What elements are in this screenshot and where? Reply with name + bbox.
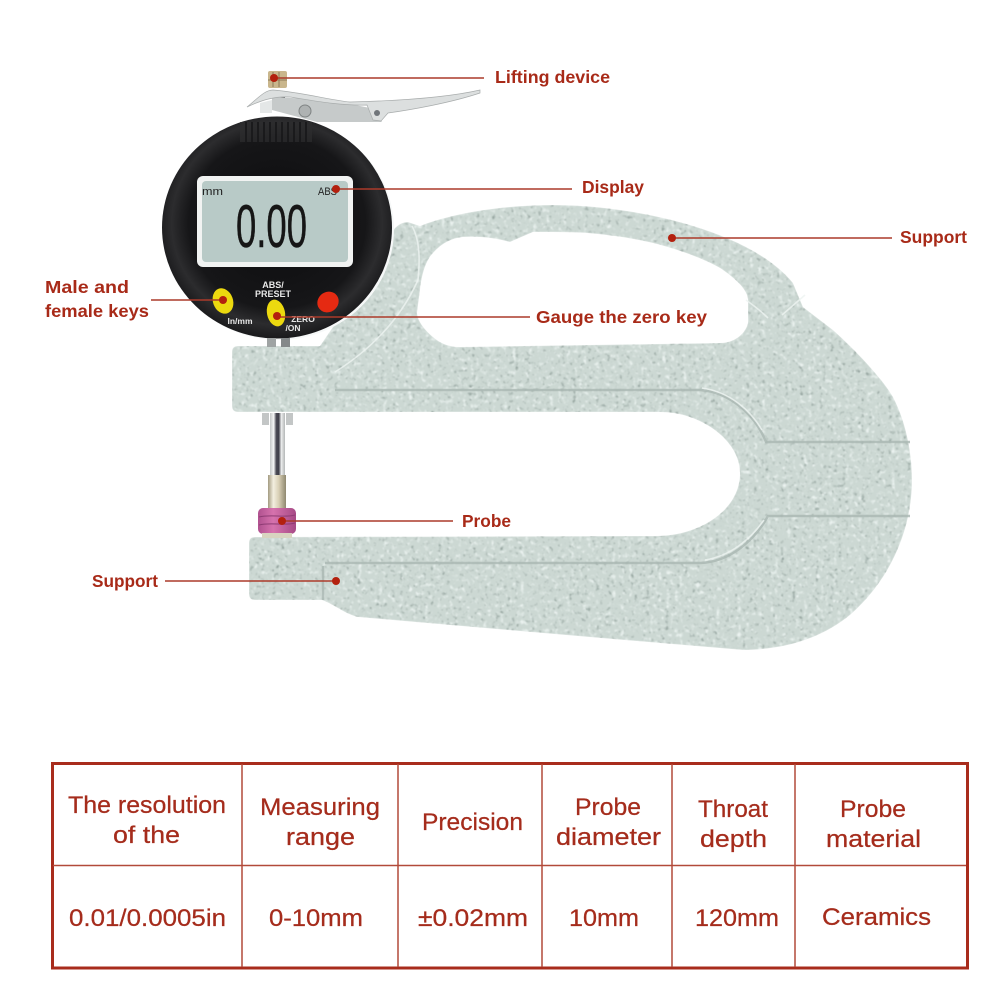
column: measuring range: [260, 794, 380, 932]
callout: lower support: [92, 571, 340, 591]
callout: upper support: Support: [900, 227, 967, 247]
column: throat depth: depth: [700, 826, 767, 853]
column: throat depth: [695, 796, 779, 932]
digital dial: [162, 116, 394, 347]
callout: probe: Probe: [462, 511, 511, 531]
callout: upper support: [668, 227, 967, 247]
column: resolution: of the: [113, 822, 180, 849]
callout: male and female keys: female keys: [45, 301, 149, 321]
LCD display: [197, 176, 353, 267]
probe: [258, 413, 296, 538]
column: resolution: 0.01/0.0005in: [69, 905, 226, 932]
column: precision: Precision: [422, 809, 523, 836]
column: resolution: [68, 792, 226, 932]
column: resolution: The resolution: [68, 792, 226, 819]
LCD display: 0.00: [236, 193, 307, 260]
column: probe material: material: [826, 826, 921, 853]
callout: gauge the zero key: [273, 307, 707, 327]
column: measuring range: 0-10mm: [269, 905, 363, 932]
dial keys: In/mm: [227, 316, 253, 326]
callout: display: [332, 177, 644, 197]
column: precision: ±0.02mm: [418, 905, 528, 932]
dial keys: ABS/: [262, 280, 284, 290]
callout: lower support: Support: [92, 571, 158, 591]
column: probe diameter: 10mm: [569, 905, 639, 932]
column: probe material: Ceramics: [822, 904, 931, 931]
dial keys: ZERO: [291, 314, 315, 324]
specification table: [52, 764, 968, 968]
column: probe diameter: [556, 794, 661, 932]
callout: male and female keys: Male and: [45, 277, 129, 297]
callout: gauge the zero key: Gauge the zero key: [536, 307, 707, 327]
column: probe material: Probe: [840, 796, 906, 823]
callout: male and female keys: [45, 277, 227, 321]
callout: lifting device: [270, 67, 610, 87]
LCD display: ABS: [318, 186, 337, 198]
column: measuring range: range: [286, 824, 355, 851]
column: probe diameter: diameter: [556, 824, 661, 851]
lifting device: [247, 71, 480, 122]
LCD display: mm: [202, 186, 223, 198]
column: precision: [418, 809, 528, 932]
dial keys: /ON: [285, 323, 301, 333]
dial keys: PRESET: [255, 289, 292, 299]
column: probe material: [822, 796, 931, 931]
callout: probe: [278, 511, 511, 531]
column: throat depth: 120mm: [695, 905, 779, 932]
column: throat depth: Throat: [698, 796, 768, 823]
dial keys: [209, 280, 343, 333]
column: probe diameter: Probe: [575, 794, 641, 821]
callout: lifting device: Lifting device: [495, 67, 610, 87]
callout: display: Display: [582, 177, 644, 197]
gauge frame: [232, 205, 912, 650]
column: measuring range: Measuring: [260, 794, 380, 821]
